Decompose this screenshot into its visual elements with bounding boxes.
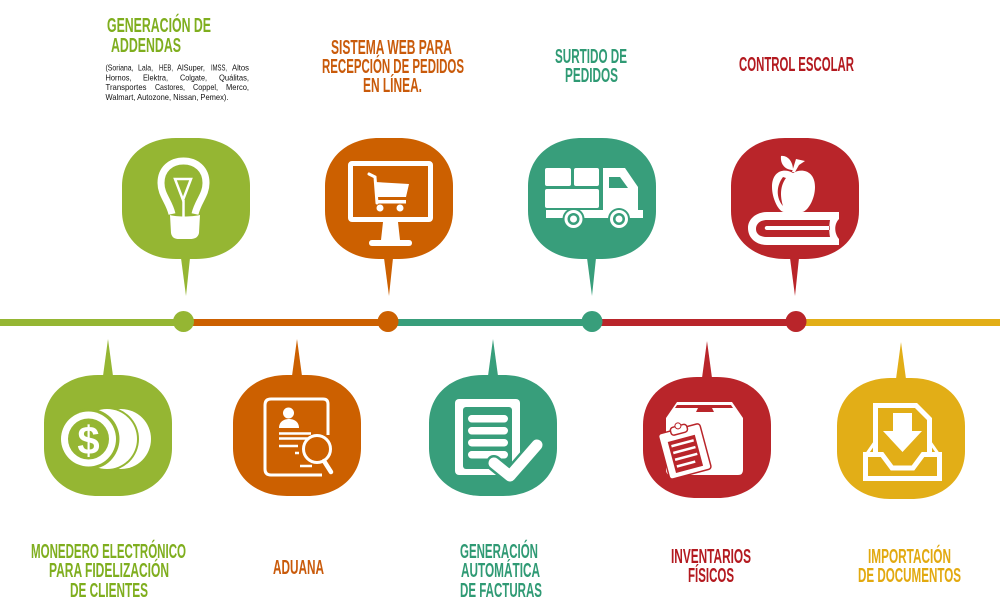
title: inventarios físicos [671, 545, 751, 587]
text block: addenda clients: IMSS, [211, 62, 227, 72]
icon: light bulb [161, 161, 206, 239]
title: aduana: ADUANA [273, 556, 324, 579]
title: monedero electrónico [31, 539, 186, 602]
text block: addenda clients: Quálitas, [219, 72, 249, 82]
panel: coins marker [44, 339, 172, 496]
title: generación automática de facturas: DE FACTURAS [460, 579, 542, 602]
title: monedero electrónico: MONEDERO ELECTRÓNICO [31, 539, 186, 563]
panel: invoice marker [429, 339, 557, 496]
title: sistema web: SISTEMA WEB PARA [331, 36, 452, 59]
text block: addenda clients: Castores, [155, 82, 185, 92]
title: sistema web: RECEPCIÓN DE PEDIDOS [322, 54, 464, 78]
text block: addenda clients: Hornos, [106, 72, 132, 82]
icon: truck [545, 168, 643, 230]
panel: shopping marker [325, 138, 453, 296]
icon: coins [58, 407, 151, 471]
text block: addenda clients: Merco, [226, 82, 249, 92]
title: surtido de pedidos: SURTIDO DE [555, 45, 627, 68]
text block: addenda clients: Coppel, [193, 82, 218, 92]
icon: inbox with arrow [866, 406, 940, 478]
title: sistema web: EN LÍNEA. [363, 74, 422, 97]
text block: addenda clients: HEB, [159, 62, 173, 72]
panel: import marker [837, 342, 965, 499]
panel: school marker [731, 138, 859, 296]
title: surtido de pedidos: PEDIDOS [565, 64, 618, 87]
text block: addenda clients: Transportes [106, 82, 146, 92]
title: generación automática de facturas: AUTOMÁTICA [461, 559, 540, 582]
title: generación de addendas [107, 13, 211, 57]
title: sistema web [322, 36, 464, 97]
text block: addenda clients: Lala, [138, 62, 153, 72]
icon: coins: $ [77, 419, 100, 463]
text block: addenda clients: Walmart, Autozone, Nissan, Pemex). [106, 92, 228, 102]
icon: apple on book [748, 156, 839, 245]
icon: box and clipboard [656, 402, 743, 480]
icon: monitor with cart [350, 164, 430, 246]
text block: addenda clients [106, 62, 249, 102]
title: inventarios físicos: FÍSICOS [688, 564, 734, 587]
title: generación de addendas: ADDENDAS [111, 34, 181, 57]
title: monedero electrónico: DE CLIENTES [70, 579, 148, 602]
icon: document with magnifier [265, 399, 331, 475]
panel: truck marker [528, 138, 656, 296]
title: monedero electrónico: PARA FIDELIZACIÓN [49, 558, 169, 582]
text block: addenda clients: Elektra, [143, 72, 168, 82]
panel: customs marker [233, 339, 361, 496]
panel: bulb marker [122, 138, 250, 296]
text block: addenda clients: AlSuper, [177, 62, 205, 72]
icon: document with check [455, 399, 537, 476]
title: generación automática de facturas [460, 539, 542, 602]
timeline [0, 311, 1000, 332]
text block: addenda clients: Altos [232, 62, 249, 72]
title: surtido de pedidos [555, 45, 627, 87]
title: generación de addendas: GENERACIÓN DE [107, 13, 211, 37]
title: control escolar: CONTROL ESCOLAR [739, 53, 854, 76]
panel: inventory marker [643, 341, 771, 498]
title: importación de documentos [858, 544, 961, 587]
title: inventarios físicos: INVENTARIOS [671, 545, 751, 568]
title: generación automática de facturas: GENERACIÓN [460, 539, 538, 563]
text block: addenda clients: (Soriana, [106, 62, 134, 72]
text block: addenda clients: Colgate, [180, 72, 207, 82]
